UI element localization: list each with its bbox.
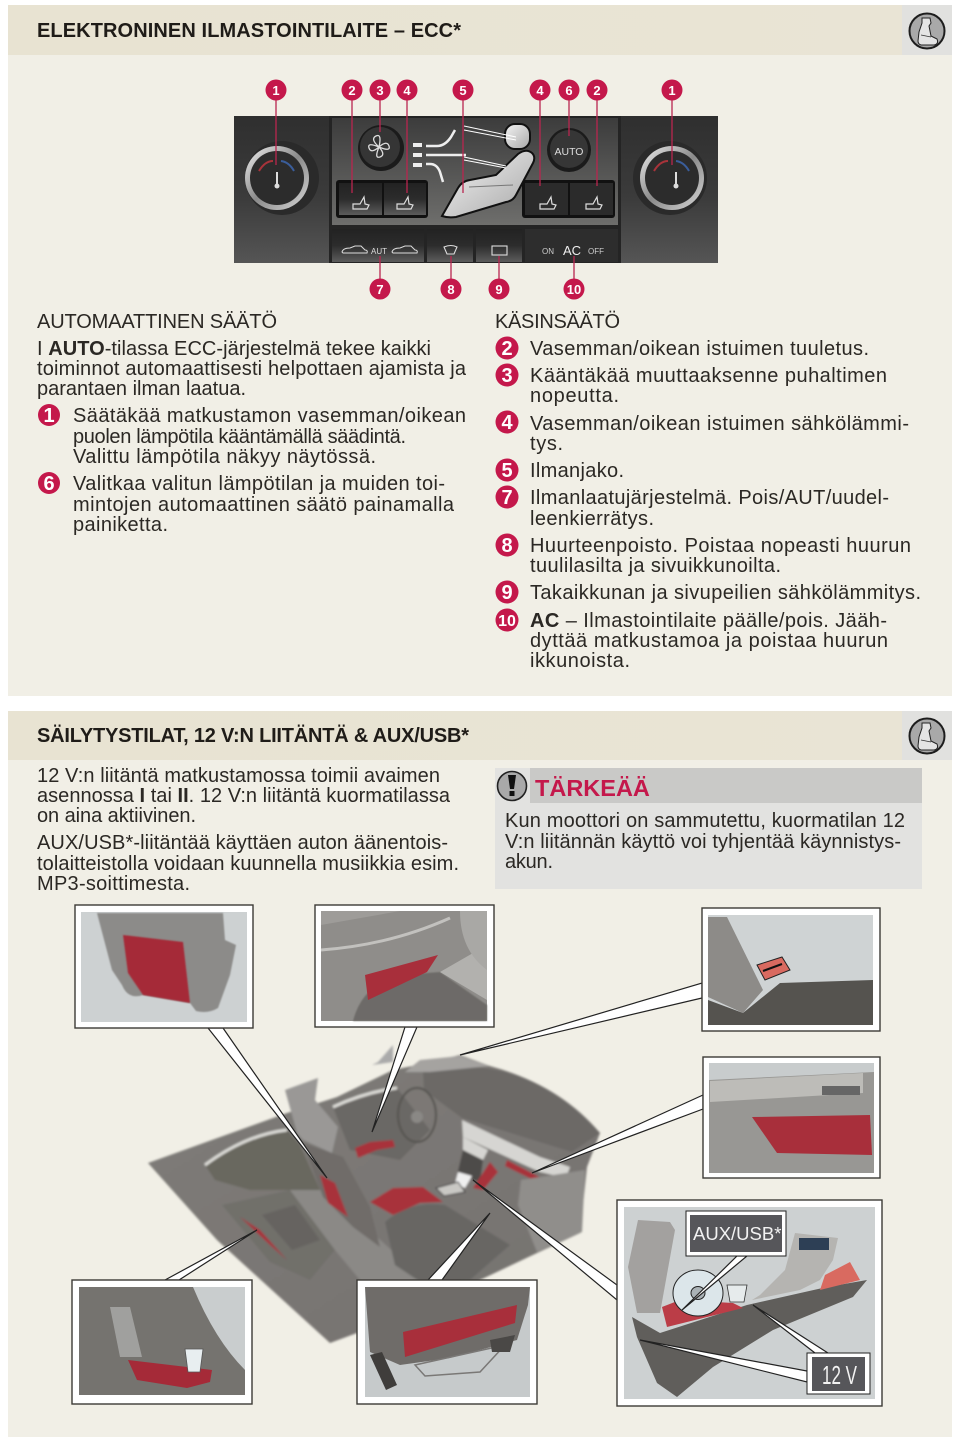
text block: automatic control: 1 (43, 405, 55, 427)
auto knob (547, 128, 591, 172)
icon: seat, storage (902, 711, 952, 760)
text block: manual control: 10 (498, 613, 516, 630)
fan knob (358, 125, 404, 171)
text block: 12 V and AUX/USB: AUX/USB*-liitäntää käyttäen auton äänentois- (37, 832, 448, 854)
text block: manual control: 8 (501, 535, 513, 557)
text block: automatic control: parantaen ilman laatua. (37, 378, 246, 400)
callout wedges (165, 983, 703, 1300)
rear seat and floor (222, 1190, 335, 1280)
temperature knob left (245, 141, 319, 215)
callout numbers: 2 (348, 83, 356, 98)
text block: manual control: Vasemman/oikean istuimen sähkölämmi- (530, 413, 909, 435)
front seat (285, 1078, 338, 1153)
text block: 12 V and AUX/USB: 12 V:n liitäntä matkustamossa toimii avaimen (37, 765, 440, 787)
callout: important: TÄRKEÄÄ (535, 775, 650, 801)
text block: automatic control: Valitkaa valitun lämpötilan ja muiden toi- (73, 473, 445, 495)
callout numbers: 8 (447, 282, 455, 297)
text block: manual control: Ilmanjako. (530, 460, 624, 482)
callout numbers: 3 (376, 83, 384, 98)
callout numbers: 10 (567, 282, 581, 297)
door panels and rails (205, 1130, 320, 1190)
label: 12 V: 12 V (822, 1360, 857, 1390)
text block: manual control: 7 (501, 487, 513, 509)
text block: 12 V and AUX/USB: MP3-soittimesta. (37, 873, 190, 895)
label: AUX/USB (686, 1211, 786, 1256)
center stack (463, 1137, 488, 1160)
text block: 12 V and AUX/USB: tolaitteistolla voidaan kuunnella musiikkia esim. (37, 853, 459, 875)
text block: manual control: leenkierrätys. (530, 508, 654, 530)
text block: manual control: ikkunoista. (530, 650, 630, 672)
inset: centre console (617, 1200, 882, 1406)
callout: important (495, 768, 922, 889)
inset: seat back pocket (75, 905, 253, 1028)
inset: seat edge storage (357, 1280, 537, 1404)
callout numbers: 7 (376, 282, 384, 297)
inset: rear armrest (72, 1280, 252, 1404)
text block: manual control: KÄSINSÄÄTÖ (495, 311, 620, 333)
text block: automatic control: 6 (43, 473, 55, 495)
text block: manual control: Ilmanlaatujärjestelmä. Pois/AUT/uudel- (530, 487, 889, 509)
inset: door pocket (315, 905, 494, 1027)
bottom buttons row: OFF (588, 247, 604, 256)
callout: important: V:n liitännän käyttö voi tyhjentää käynnistys- (505, 831, 901, 853)
text block: manual control: 2 (501, 338, 513, 360)
callout numbers: 6 (565, 83, 573, 98)
bottom buttons row: AUT (371, 247, 387, 256)
label: 12 V (807, 1353, 870, 1394)
text block: automatic control: I AUTO-tilassa ECC-järjestelmä tekee kaikki (37, 338, 431, 360)
text block: automatic control (37, 311, 467, 536)
panel: climate control background (8, 5, 952, 696)
text block: manual control: 4 (501, 412, 513, 434)
heading: storage: SÄILYTYSTILAT, 12 V:N LIITÄNTÄ & AUX/USB* (37, 724, 469, 747)
text block: manual control: Kääntäkää muuttaaksenne puhaltimen (530, 365, 887, 387)
text block: manual control: 9 (501, 582, 513, 604)
callout numbers: 9 (495, 282, 503, 297)
text block: automatic control: toiminnot automaattisesti helpottaen ajamista ja (37, 358, 467, 380)
icon: warning (498, 772, 526, 800)
callout: important: akun. (505, 851, 553, 873)
panel: storage background (8, 711, 952, 1437)
steering wheel (398, 1088, 436, 1142)
heading: climate control: ELEKTRONINEN ILMASTOINTILAITE – ECC* (37, 20, 461, 42)
callout numbers: 2 (593, 83, 601, 98)
heading: storage (8, 711, 902, 760)
bottom buttons row: ON (542, 247, 554, 256)
car interior illustration (148, 1045, 600, 1343)
callout numbers: 4 (536, 83, 544, 98)
air distribution seat symbol (413, 124, 534, 217)
text block: manual control: nopeutta. (530, 385, 619, 407)
text block: manual control: dyttää matkustamoa ja poistaa huurun (530, 630, 888, 652)
text block: manual control: Vasemman/oikean istuimen tuuletus. (530, 338, 869, 360)
callout numbers: 1 (668, 83, 676, 98)
control panel illustration (234, 80, 718, 300)
inset: glove box (703, 1057, 880, 1178)
heading: climate control (8, 5, 902, 55)
auto knob: AUTO (555, 146, 583, 158)
temperature knob right (633, 141, 707, 215)
inset: windshield card holder (702, 908, 880, 1031)
callout numbers (266, 80, 682, 300)
text block: manual control: AC – Ilmastointilaite päälle/pois. Jääh- (530, 610, 887, 632)
text block: 12 V and AUX/USB: on aina aktiivinen. (37, 805, 196, 827)
text block: automatic control: mintojen automaattinen säätö painamalla (73, 494, 455, 516)
bottom buttons row: AC (563, 243, 581, 258)
text block: automatic control: painiketta. (73, 514, 168, 536)
text block: 12 V and AUX/USB (37, 765, 459, 895)
text block: manual control: 5 (501, 460, 513, 482)
text block: 12 V and AUX/USB: asennossa I tai II. 12 V:n liitäntä kuormatilassa (37, 785, 451, 807)
seat buttons (336, 180, 615, 218)
icon: seat, top (902, 5, 952, 55)
text block: manual control: tuulilasilta ja sivuikkunoilta. (530, 555, 781, 577)
text block: automatic control: puolen lämpötila kääntämällä säädintä. (73, 426, 406, 448)
label: AUX/USB: AUX/USB* (693, 1223, 781, 1244)
text block: automatic control: Säätäkää matkustamon vasemman/oikean (73, 405, 466, 427)
text block: manual control (495, 311, 921, 672)
callout: important: Kun moottori on sammutettu, kuormatilan 12 (505, 810, 905, 832)
callout numbers: 5 (459, 83, 467, 98)
callout numbers: 1 (272, 83, 280, 98)
text block: manual control: 3 (501, 365, 513, 387)
text block: manual control: Huurteenpoisto. Poistaa nopeasti huurun (530, 535, 911, 557)
text block: manual control: Takaikkunan ja sivupeilien sähkölämmitys. (530, 582, 921, 604)
text block: automatic control: AUTOMAATTINEN SÄÄTÖ (37, 311, 277, 333)
text block: automatic control: Valittu lämpötila näkyy näytössä. (73, 446, 376, 468)
text block: manual control: tys. (530, 433, 563, 455)
dashboard top (423, 1067, 600, 1152)
callout numbers: 4 (403, 83, 411, 98)
red storage areas (355, 1140, 395, 1158)
bottom buttons row (332, 229, 618, 262)
